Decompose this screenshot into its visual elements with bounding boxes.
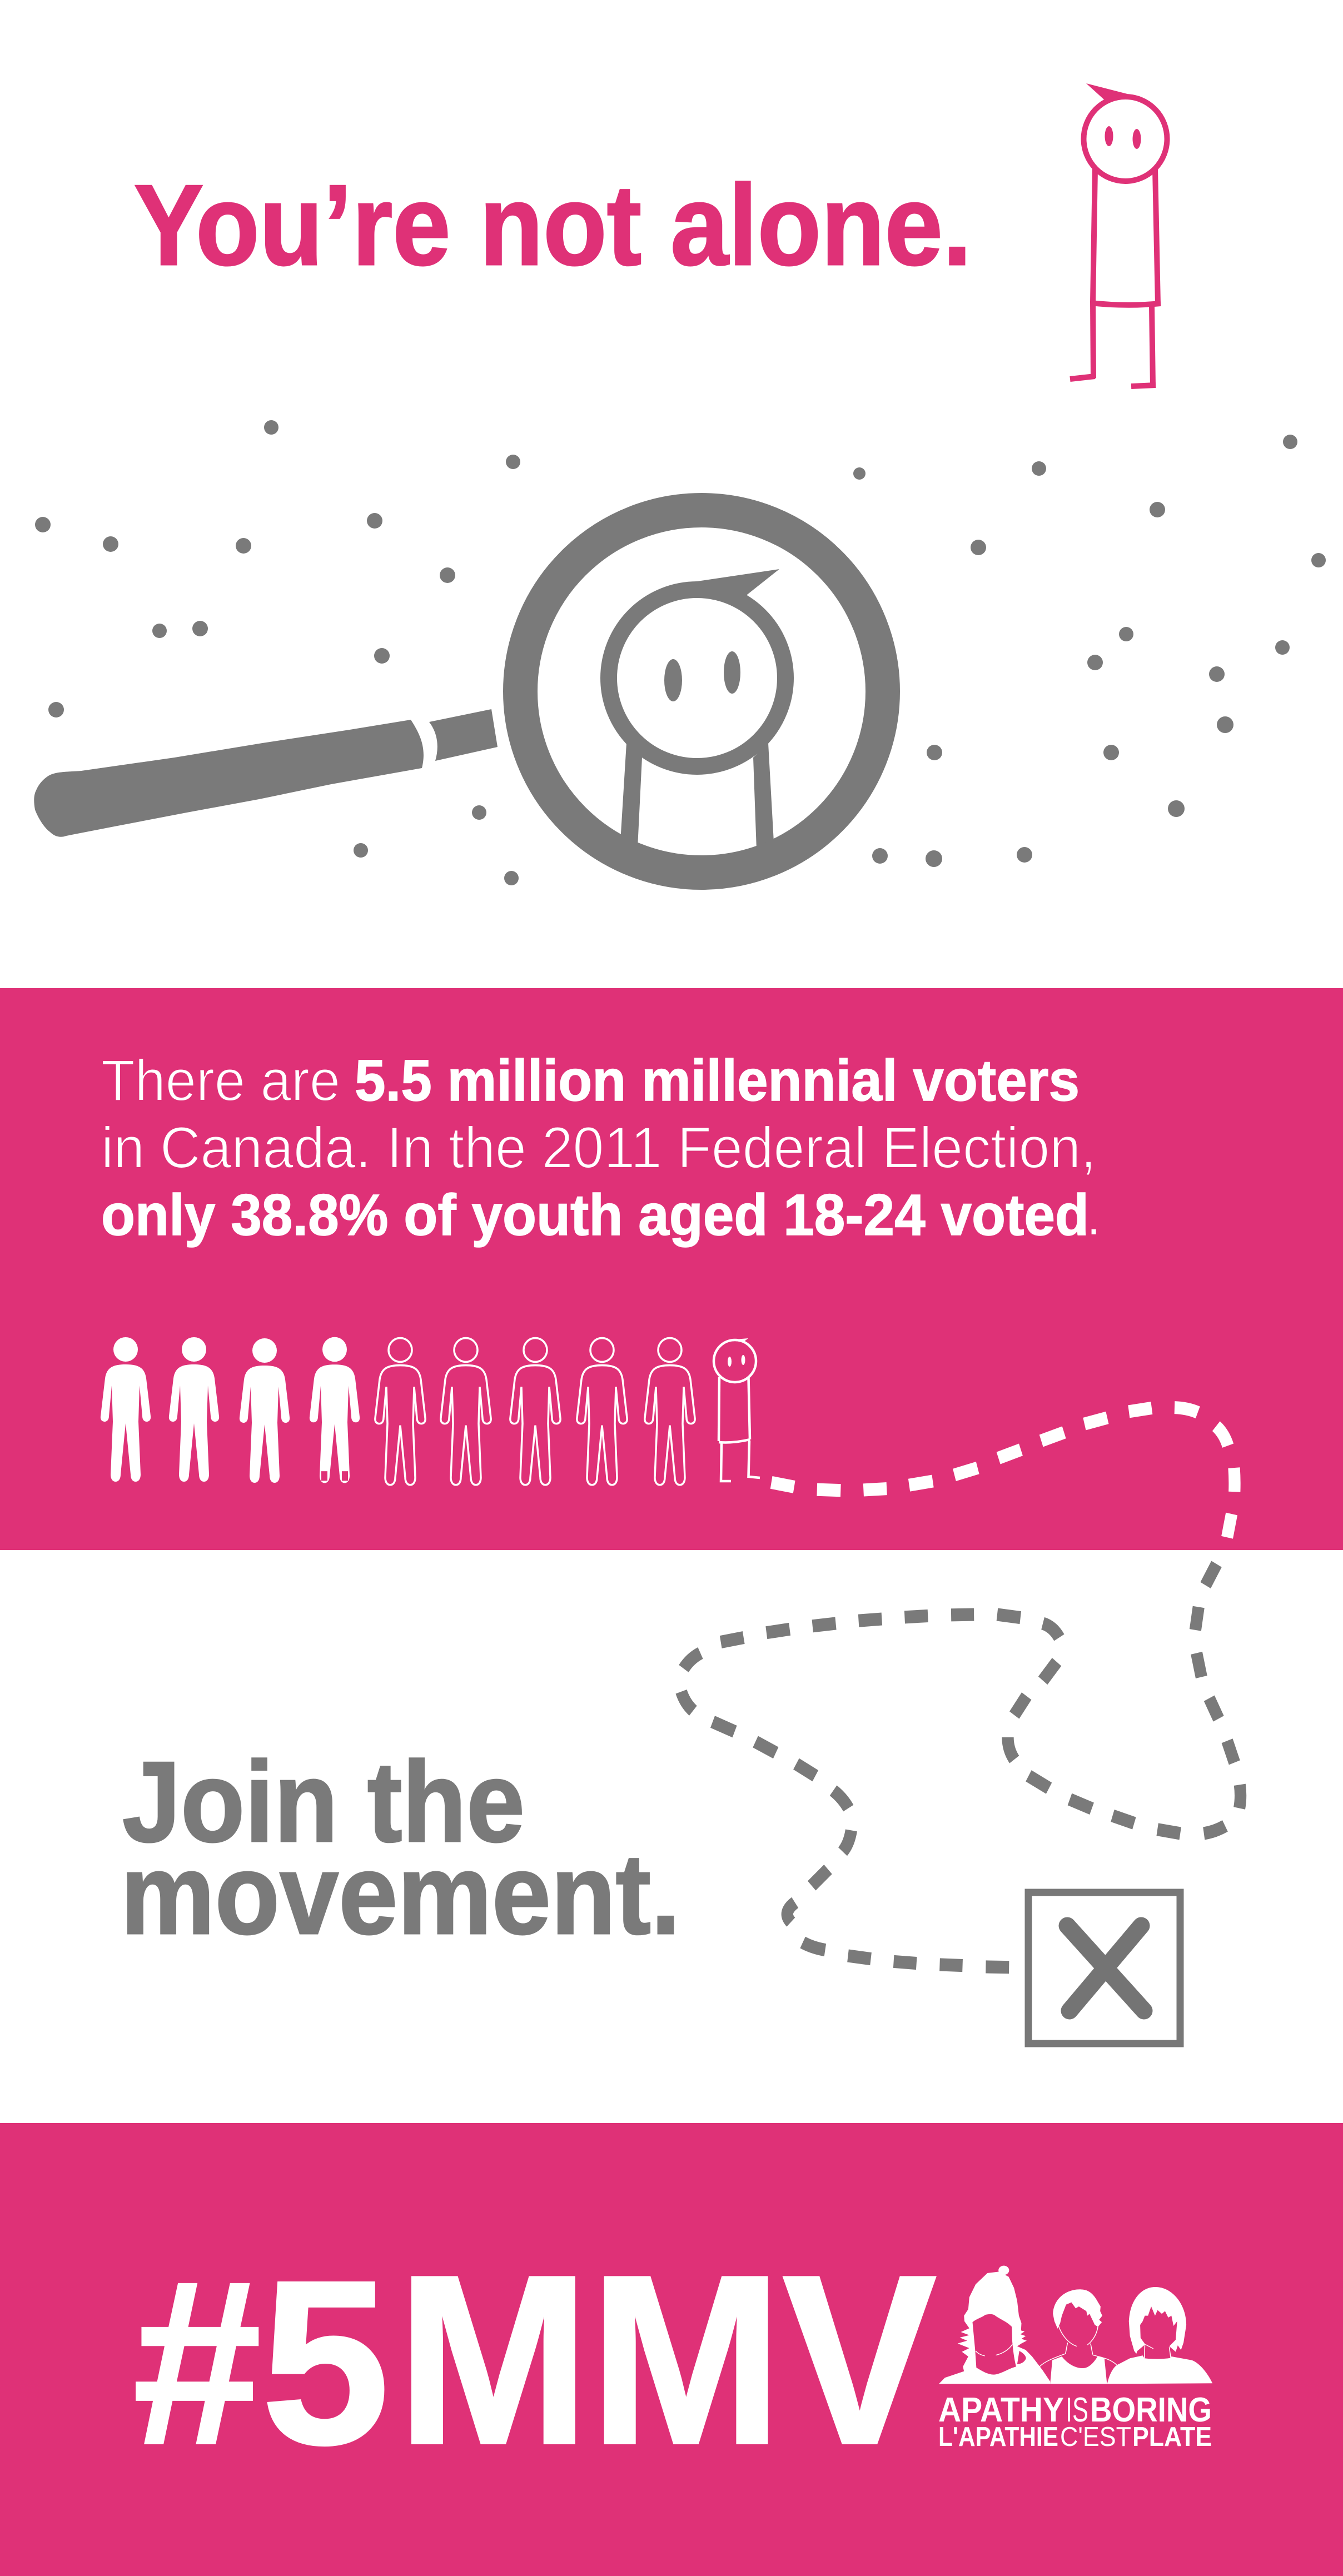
statistic text: There are: [101, 1048, 340, 1113]
statistic text: [101, 1048, 1102, 1248]
hashtag: [133, 2225, 938, 2494]
statistic text: 5.5 million millennial voters: [355, 1048, 1080, 1113]
dashed path, grey section: [682, 1564, 1241, 1967]
logo: Apathy is Boring: [938, 2266, 1212, 2452]
panel: pink hashtag band: [0, 2123, 1343, 2576]
handle: [34, 720, 424, 837]
logo silhouettes: [939, 2266, 1212, 2384]
hashtag: #5: [133, 2233, 390, 2493]
logo wordmark: BORING: [1090, 2391, 1212, 2429]
statistic text: only 38.8% of youth aged 18-24 voted: [101, 1183, 1089, 1248]
icon: ballot box with X: [1028, 1892, 1180, 2044]
dashed path, white section: [772, 1408, 1235, 1537]
logo wordmark: [938, 2391, 1212, 2452]
eyes: [664, 651, 740, 701]
panel: pink statistics band: [0, 988, 1343, 1550]
icon: magnifying glass with figure: [34, 510, 883, 873]
handle neck: [429, 709, 498, 761]
icon: white stick figure: [714, 1338, 760, 1481]
heading: join the movement: [121, 1738, 680, 1958]
heading: join the movement: Join the: [122, 1738, 525, 1866]
logo wordmark: PLATE: [1132, 2422, 1212, 2452]
icon: pink stick figure: [1070, 83, 1167, 387]
logo wordmark: IS: [1066, 2391, 1088, 2429]
statistic text: in Canada. In the 2011 Federal Election,: [101, 1115, 1096, 1180]
heading: join the movement: movement.: [121, 1830, 680, 1958]
logo wordmark: L'APATHIE: [938, 2422, 1058, 2452]
logo wordmark: C'EST: [1060, 2422, 1131, 2452]
figure head: [609, 590, 785, 766]
statistic text: .: [1086, 1183, 1102, 1248]
figure body: [620, 743, 774, 850]
title: You’re not alone.: [134, 161, 972, 289]
lens ring: [520, 510, 883, 873]
logo wordmark: APATHY: [938, 2391, 1064, 2429]
scattered dots representing people: [35, 420, 1326, 885]
hair tuft: [693, 569, 779, 604]
hashtag: MMV: [397, 2225, 938, 2494]
people row: four of ten voted: [101, 1337, 695, 1485]
